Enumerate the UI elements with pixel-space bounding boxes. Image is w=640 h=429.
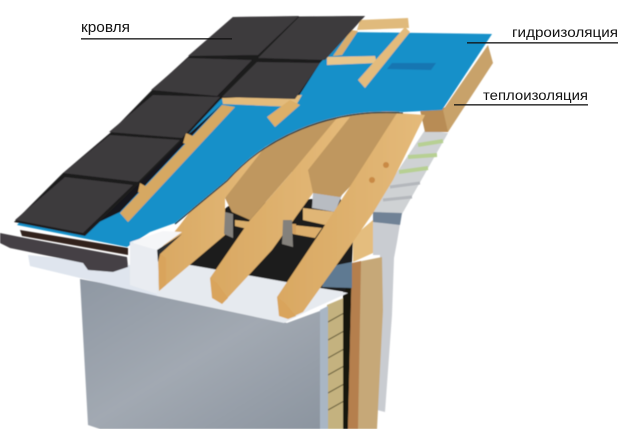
shadow under shingles: [95, 104, 222, 224]
foil behind insulation: [312, 193, 342, 212]
rafter 2: [210, 117, 350, 304]
label: теплоизоляция: теплоизоляция: [483, 87, 588, 103]
shingle backing shadow: [14, 16, 365, 236]
wall foil membrane: [371, 130, 448, 412]
rafter 1: [158, 147, 265, 291]
cross beams: [235, 208, 336, 238]
grey metal brackets: [224, 212, 293, 247]
rafter 3: [277, 113, 425, 319]
label: гидроизоляция: гидроизоляция: [512, 24, 618, 40]
roof laths top right: [222, 18, 410, 127]
dark wall gap: [343, 262, 352, 429]
dark under-layer at eave: [20, 230, 128, 255]
white fascia flashing: [130, 231, 182, 294]
label: кровля: кровля: [81, 19, 130, 36]
blue-grey batten detail: [322, 262, 352, 288]
lath along eave: [120, 105, 235, 222]
brick wall column: [320, 297, 346, 429]
membrane edge shadow: [175, 113, 403, 224]
label: теплоизоляция: [454, 87, 588, 106]
dark attic cavity: [170, 197, 353, 292]
wood block under rafter: [353, 220, 373, 262]
metal gutter: [0, 233, 128, 272]
white soffit board: [157, 256, 348, 323]
membrane overlap shadow: [387, 63, 436, 70]
wall insulation board: [348, 257, 383, 429]
roof assembly: [0, 16, 493, 429]
roof insulation blocks: [225, 45, 493, 220]
grey wall panel: [80, 279, 328, 429]
shingles: [15, 16, 365, 233]
blue waterproofing membrane: [17, 30, 492, 247]
